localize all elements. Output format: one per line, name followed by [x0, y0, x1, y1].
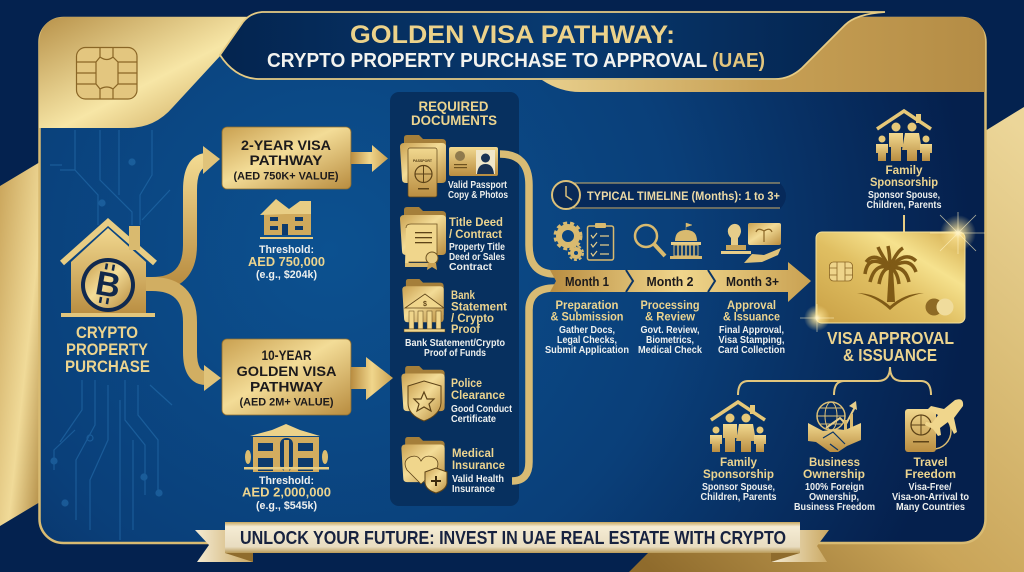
document: passport — [400, 135, 508, 201]
description: Insurance — [452, 484, 495, 495]
crypto property purchase — [61, 222, 155, 376]
month labels — [565, 275, 779, 289]
bottom ribbon banner — [195, 522, 829, 562]
month labels: Month 2 — [646, 275, 694, 289]
month labels: Month 3+ — [726, 275, 779, 289]
documents heading: REQUIRED — [418, 99, 489, 114]
heading: Ownership — [803, 469, 865, 481]
description: Property Title — [449, 242, 505, 253]
threshold 10-year: (e.g., $545k) — [256, 500, 317, 512]
icon: stamp and card in hand — [721, 223, 781, 263]
month 2 details: & Review — [645, 312, 695, 324]
documents heading: DOCUMENTS — [411, 113, 497, 128]
month 3 details: Final Approval, — [719, 325, 784, 336]
heading: Travel — [914, 457, 948, 469]
title banner — [220, 12, 885, 79]
gold flow lines from documents into timeline — [500, 154, 555, 481]
arrow: 10-year to documents — [351, 357, 393, 400]
threshold 2-year — [248, 244, 325, 281]
description — [866, 190, 942, 211]
label — [65, 324, 150, 376]
card heading — [827, 328, 954, 365]
text: / Contract — [449, 227, 502, 241]
description: Good Conduct — [451, 404, 513, 415]
branching arrows from property — [140, 146, 221, 391]
timeline header — [552, 181, 786, 209]
benefit: family sponsorship — [700, 402, 777, 503]
icon: badge folder — [401, 366, 445, 421]
description: Visa-Free/ — [908, 482, 952, 493]
text: Police — [451, 376, 482, 390]
2-year plaque: PATHWAY — [250, 152, 323, 168]
timeline arrow — [550, 262, 811, 302]
month 2 details: Govt. Review, — [640, 325, 700, 336]
benefits bracket — [738, 367, 931, 395]
top family sponsorship — [866, 111, 942, 211]
icon: house with bitcoin: B — [93, 264, 123, 306]
description: Ownership, — [809, 492, 859, 503]
description — [405, 338, 505, 359]
title line 1: GOLDEN VISA PATHWAY: — [350, 21, 675, 49]
text: Proof — [451, 322, 481, 336]
month 2 details — [638, 300, 702, 356]
timeline label: TYPICAL TIMELINE (Months): 1 to 3+ — [587, 189, 780, 203]
description: Children, Parents — [700, 492, 777, 503]
text — [448, 180, 508, 201]
icon: small house — [260, 199, 313, 239]
text: Copy & Photos — [448, 190, 508, 201]
document: bank statement — [402, 279, 507, 359]
month 3 details: Approval — [727, 300, 776, 312]
threshold 2-year: Threshold: — [259, 244, 314, 256]
description: Visa-on-Arrival to — [892, 492, 969, 503]
icon: deed folder — [400, 207, 446, 270]
description: Sponsor Spouse, — [702, 482, 775, 493]
month 1 details: Preparation — [556, 300, 618, 312]
description: 100% Foreign — [805, 482, 864, 493]
description — [451, 404, 513, 425]
icon: house with bitcoin — [61, 222, 155, 317]
timeline icons — [555, 223, 781, 263]
text — [451, 288, 507, 336]
month 2 details: Biometrics, — [646, 335, 694, 346]
month 1 details: Legal Checks, — [557, 335, 617, 346]
month 1 details: Submit Application — [545, 345, 629, 356]
heading: Family — [720, 457, 758, 469]
10-year plaque: (AED 2M+ VALUE) — [240, 396, 334, 408]
text — [449, 215, 503, 241]
month 3 details: Visa Stamping, — [718, 335, 785, 346]
description — [794, 482, 875, 513]
label: PURCHASE — [65, 358, 150, 376]
arrow: 2-year to documents — [351, 145, 388, 172]
text: Clearance — [451, 388, 505, 402]
text: Insurance — [452, 458, 505, 472]
icon: family — [710, 402, 766, 452]
threshold 2-year: (e.g., $204k) — [256, 269, 317, 281]
description — [452, 474, 504, 495]
description: Valid Health — [452, 474, 504, 485]
icon: passport folder: PASSPORT — [413, 159, 433, 163]
text — [451, 376, 505, 402]
10-year plaque: 10-YEAR — [262, 347, 312, 363]
icon: passport and plane — [905, 399, 963, 452]
icon: card chip — [76, 47, 137, 99]
heading — [703, 457, 774, 481]
month 2 details: Medical Check — [638, 345, 702, 356]
label: CRYPTO — [76, 324, 138, 342]
month 1 details: Gather Docs, — [559, 325, 615, 336]
icon: villa — [244, 424, 329, 472]
text: Bank — [451, 288, 475, 302]
benefit: business ownership — [794, 401, 875, 513]
heading: Family — [886, 165, 923, 177]
heading: Business — [809, 457, 860, 469]
document: title deed — [400, 207, 505, 273]
month labels: Month 1 — [565, 275, 609, 289]
panel: required documents — [390, 92, 519, 506]
icon: bank folder: $ — [423, 301, 427, 308]
10-year plaque: PATHWAY — [250, 378, 324, 394]
icon: magnifier and government building — [635, 223, 702, 259]
description — [700, 482, 777, 503]
threshold 10-year: AED 2,000,000 — [242, 486, 331, 500]
text — [452, 446, 505, 472]
month 2 details: Processing — [640, 300, 700, 312]
description: Many Countries — [896, 502, 965, 513]
card heading: & ISSUANCE — [843, 345, 937, 365]
title line 2: CRYPTO PROPERTY PURCHASE TO APPROVAL (UAE) — [267, 50, 765, 72]
month 3 details — [718, 300, 785, 356]
gold visa card — [816, 232, 965, 323]
description: Contract — [449, 262, 493, 273]
month 1 details — [545, 300, 629, 356]
top-right gold corner — [542, 17, 985, 92]
description — [449, 242, 505, 273]
text: Medical — [452, 446, 494, 460]
icon: globe and handshake — [808, 401, 861, 452]
connector to card — [903, 215, 905, 233]
10-year plaque: GOLDEN VISA — [236, 363, 336, 379]
circuit traces — [50, 130, 172, 540]
icon: id photo — [449, 147, 498, 176]
2-year plaque: 2-YEAR VISA — [241, 137, 331, 153]
threshold 10-year — [242, 475, 331, 512]
text: Statement — [451, 300, 507, 314]
description — [892, 482, 969, 513]
description: Proof of Funds — [424, 348, 486, 359]
description: Deed or Sales — [449, 252, 505, 263]
text: Valid Passport — [448, 180, 508, 191]
description: Bank Statement/Crypto — [405, 338, 505, 349]
benefit: travel freedom — [892, 399, 969, 513]
icon: gears and checklist — [555, 223, 614, 260]
10-year plaque — [222, 339, 351, 415]
ribbon text: UNLOCK YOUR FUTURE: INVEST IN UAE REAL ESTATE WITH CRYPTO — [240, 527, 786, 548]
heading — [905, 457, 956, 481]
icon: card chip — [829, 262, 853, 281]
heading: Sponsorship — [870, 177, 938, 189]
description: Children, Parents — [866, 200, 942, 211]
threshold 10-year: Threshold: — [259, 475, 314, 487]
icon: clock — [552, 181, 580, 209]
month 3 details: Card Collection — [718, 345, 785, 356]
icon: family — [876, 111, 932, 161]
heading — [803, 457, 865, 481]
text: Title Deed — [449, 215, 503, 229]
description: Certificate — [451, 414, 496, 425]
icon: palm tree — [857, 246, 924, 310]
document: police clearance — [401, 366, 513, 425]
documents heading — [411, 99, 497, 128]
top-left gold card corner — [39, 17, 256, 128]
heading: Sponsorship — [703, 469, 774, 481]
description: Business Freedom — [794, 502, 875, 513]
2-year plaque — [222, 127, 351, 189]
label: PROPERTY — [66, 341, 148, 359]
threshold 2-year: AED 750,000 — [248, 255, 325, 269]
heading — [870, 165, 938, 189]
heading: Freedom — [905, 469, 956, 481]
icon: card logo — [926, 298, 954, 316]
month 1 details: & Submission — [550, 312, 624, 324]
text: / Crypto — [451, 311, 494, 325]
2-year plaque: (AED 750K+ VALUE) — [234, 170, 339, 182]
icon: heart folder — [401, 437, 447, 493]
card heading: VISA APPROVAL — [827, 328, 954, 348]
sparkles on card — [800, 212, 985, 332]
document: medical insurance — [401, 437, 505, 495]
month 3 details: & Issuance — [723, 312, 780, 324]
description: Sponsor Spouse, — [868, 190, 940, 201]
